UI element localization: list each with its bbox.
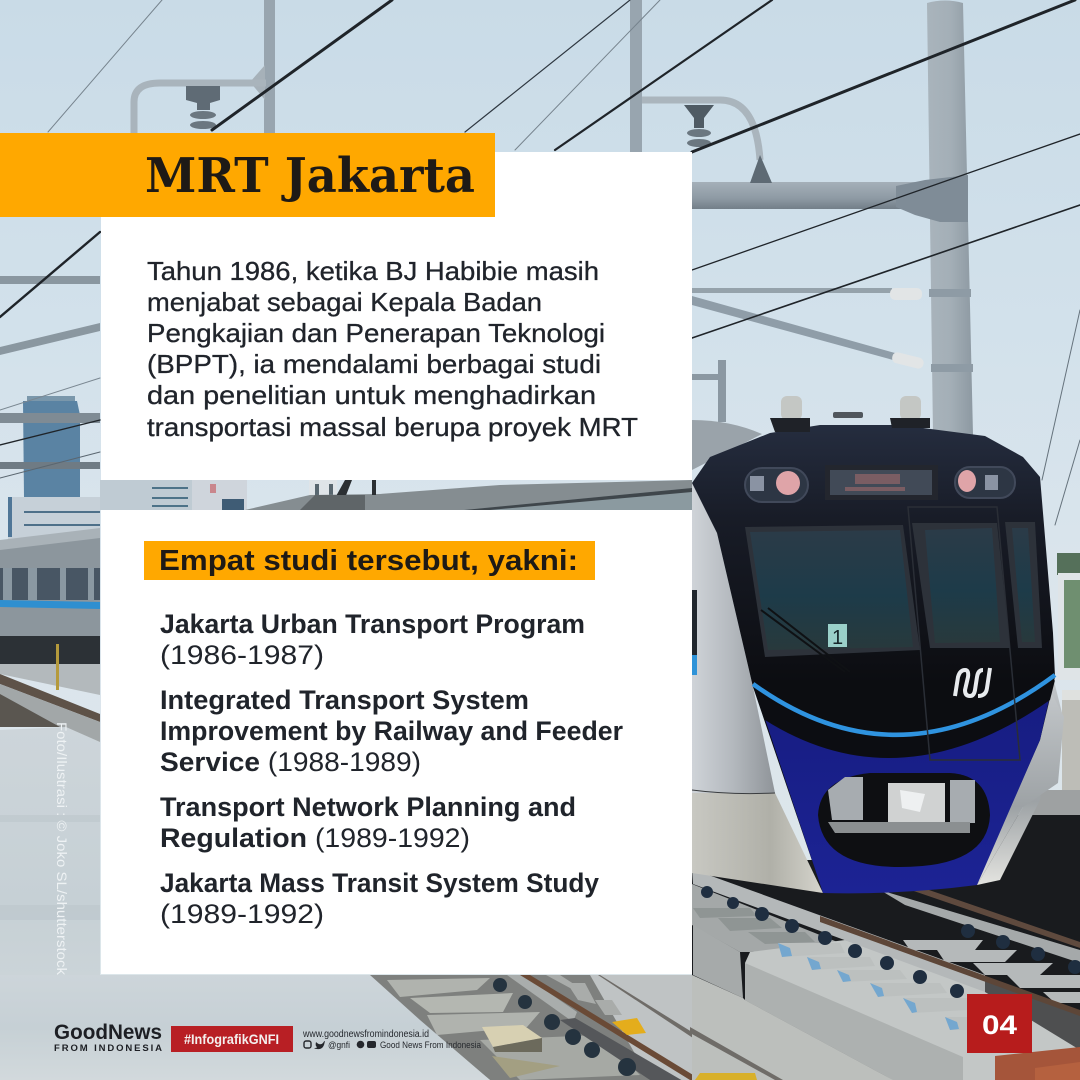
silver body xyxy=(692,483,775,793)
study 1: (1986-1987) xyxy=(160,640,324,670)
icon: twitter xyxy=(314,1041,325,1049)
rail clips xyxy=(493,978,636,1076)
study 3 xyxy=(160,792,576,853)
blue stripe xyxy=(753,675,1055,735)
upper pads xyxy=(693,908,815,944)
blue-tipped pads xyxy=(778,943,967,1030)
intro paragraph: dan penelitian untuk menghadirkan xyxy=(147,380,596,410)
beige junction box xyxy=(482,1025,542,1047)
icon: facebook xyxy=(357,1041,364,1048)
intro paragraph: transportasi massal berupa proyek MRT xyxy=(147,412,638,442)
sleepers xyxy=(387,978,490,997)
study 3: Regulation (1989-1992) xyxy=(160,823,470,853)
studies heading: Empat studi tersebut, yakni: xyxy=(159,545,578,577)
headlights and destination sign xyxy=(745,468,808,502)
study 2: Service (1988-1989) xyxy=(160,747,421,777)
track bed right xyxy=(690,860,1080,1080)
overhead catenary poles and arms xyxy=(0,0,973,469)
study 2 xyxy=(160,685,623,777)
MRT train front xyxy=(692,396,1064,893)
panel: studies background xyxy=(101,510,692,974)
distant tower and buildings xyxy=(8,396,337,540)
panel: intro text background xyxy=(101,152,692,480)
title banner xyxy=(0,133,495,217)
intro paragraph: (BPPT), ia mendalami berbagai studi xyxy=(147,349,601,379)
intro paragraph: Pengkajian dan Penerapan Teknologi xyxy=(147,318,605,348)
platform left xyxy=(0,727,100,1080)
windows xyxy=(745,525,920,657)
study 3: Transport Network Planning and xyxy=(160,792,576,822)
right side background xyxy=(985,553,1080,880)
logo xyxy=(955,668,990,696)
study 4: (1989-1992) xyxy=(160,899,324,929)
icon: instagram xyxy=(304,1041,311,1048)
logo: GoodNews From Indonesia xyxy=(54,1021,162,1054)
left train side xyxy=(0,528,100,745)
black face xyxy=(692,425,1055,893)
hashtag badge: #InfografikGNFI xyxy=(184,1032,279,1047)
coupler xyxy=(818,773,990,867)
photo credit: Foto/Ilustrasi : © Joko SL/shutterstock xyxy=(54,722,70,976)
MRT train front: 1 xyxy=(832,627,843,649)
website and social handles: Good News From Indonesia xyxy=(380,1040,482,1051)
website and social handles: @gnfi xyxy=(328,1040,350,1051)
blocks xyxy=(692,884,845,952)
intro paragraph: Tahun 1986, ketika BJ Habibie masih xyxy=(147,256,599,286)
navy lower xyxy=(757,682,1053,893)
study 2: Improvement by Railway and Feeder xyxy=(160,716,623,746)
study 2: Integrated Transport System xyxy=(160,685,529,715)
title banner: MRT Jakarta xyxy=(145,148,475,204)
study 1: Jakarta Urban Transport Program xyxy=(160,609,585,639)
platform lower edge xyxy=(0,975,490,1080)
study 4: Jakarta Mass Transit System Study xyxy=(160,868,599,898)
website and social handles: www.goodnewsfromindonesia.id xyxy=(302,1029,429,1040)
intro paragraph xyxy=(147,256,638,442)
overhead wires xyxy=(0,0,1080,525)
red blocks xyxy=(995,1047,1080,1080)
roof equipment xyxy=(770,396,930,432)
icon: youtube xyxy=(367,1041,376,1048)
ground and track bed lower middle xyxy=(360,975,783,1080)
logo: GoodNews From Indonesia: GoodNews xyxy=(54,1021,162,1044)
rail clips xyxy=(701,886,964,998)
door outline xyxy=(908,507,1020,760)
rail xyxy=(507,975,577,1022)
far pads xyxy=(903,940,1080,1003)
rail xyxy=(692,869,985,992)
page number xyxy=(967,994,1032,1053)
hashtag badge xyxy=(171,1026,293,1052)
study 4 xyxy=(160,868,599,929)
logo: GoodNews From Indonesia: FROM INDONESIA xyxy=(54,1043,162,1054)
intro paragraph: menjabat sebagai Kepala Badan xyxy=(147,287,542,317)
study 1 xyxy=(160,609,585,670)
page number: 04 xyxy=(982,1010,1017,1040)
distant train roof behind panels xyxy=(245,420,762,510)
website and social handles xyxy=(302,1029,482,1051)
